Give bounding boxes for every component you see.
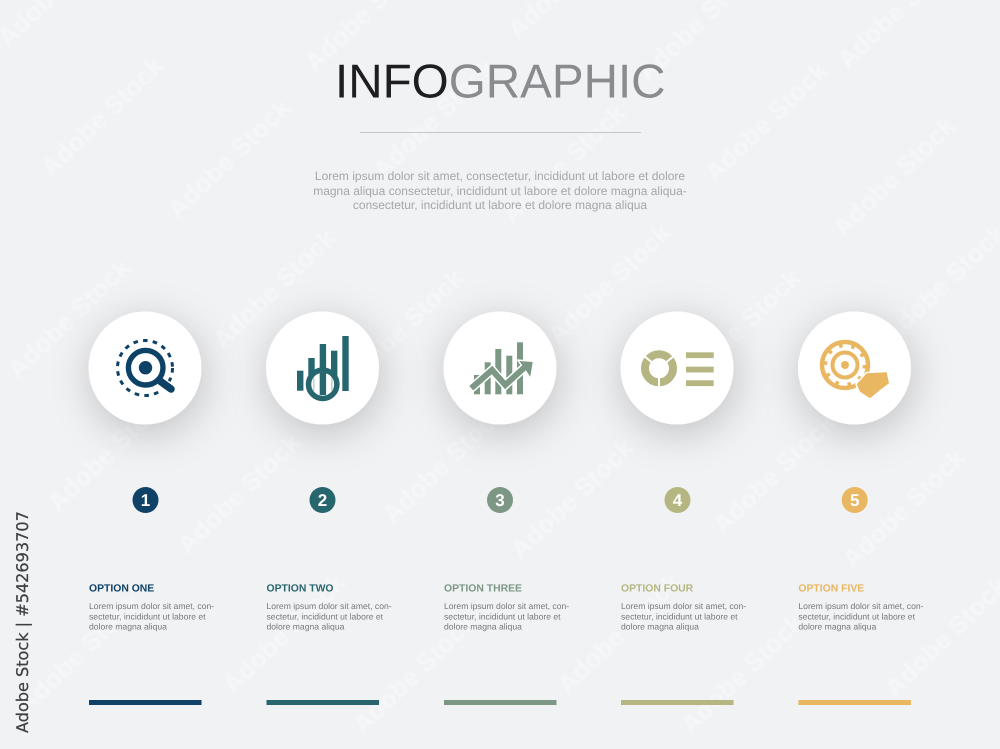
option three text: dolore magna aliqua xyxy=(444,622,522,632)
badge 3 xyxy=(487,487,513,513)
text: Adobe Stock xyxy=(698,55,834,188)
option three text: sectetur, incididunt ut labore et xyxy=(444,611,561,621)
badge 4: 4 xyxy=(673,491,683,510)
option four text: dolore magna aliqua xyxy=(621,622,699,632)
option one text: Lorem ipsum dolor sit amet, con- xyxy=(89,601,214,611)
bar 1 xyxy=(89,700,202,705)
text: Adobe Stock xyxy=(216,567,352,700)
option five text: dolore magna aliqua xyxy=(798,622,876,632)
intro text: Lorem ipsum dolor sit amet, consectetur, incididunt ut labore et dolore xyxy=(315,169,685,183)
circle 3 xyxy=(444,312,556,424)
text: Adobe Stock xyxy=(161,92,297,225)
text: Adobe Stock xyxy=(41,385,177,518)
badge 2: 2 xyxy=(318,491,327,510)
option two text xyxy=(266,584,392,632)
icon: bars with rising arrow xyxy=(471,342,533,394)
bar 3 xyxy=(444,700,556,705)
text: Adobe Stock xyxy=(11,587,147,720)
text: Adobe Stock xyxy=(504,432,640,565)
text: Adobe Stock xyxy=(496,97,632,230)
badge 3: 3 xyxy=(495,491,505,510)
text: Adobe Stock xyxy=(376,397,512,530)
intro text: magna aliqua consectetur, incididunt ut labore et dolore magna aliqua- xyxy=(313,184,687,198)
text: Adobe Stock xyxy=(206,222,342,355)
badge 4 xyxy=(664,487,690,513)
badge 5: 5 xyxy=(850,491,859,510)
circle 5 xyxy=(798,312,911,424)
icon: donut chart and list xyxy=(637,350,714,388)
icon: magnifier with dashed ring xyxy=(118,340,172,396)
option five text: sectetur, incididunt ut labore et xyxy=(798,611,916,621)
option three text: Lorem ipsum dolor sit amet, con- xyxy=(444,601,569,611)
option four text: OPTION FOUR xyxy=(621,584,694,594)
text: Adobe Stock xyxy=(1,252,137,385)
text: Adobe Stock xyxy=(541,217,677,350)
text: Adobe Stock xyxy=(551,567,687,700)
bar 4 xyxy=(621,700,734,705)
option three text xyxy=(444,584,569,632)
text: Adobe Stock xyxy=(346,607,482,740)
badge 5 xyxy=(842,487,868,513)
bar 5 xyxy=(798,700,911,705)
text: Adobe Stock xyxy=(366,52,502,185)
badge 2 xyxy=(310,487,336,513)
text: Adobe Stock xyxy=(334,262,470,395)
stock credit: Adobe Stock | #542693707 xyxy=(13,511,32,733)
text: Adobe Stock xyxy=(826,110,962,243)
option three text: OPTION THREE xyxy=(444,584,522,594)
option two text: dolore magna aliqua xyxy=(266,622,345,632)
option five text: Lorem ipsum dolor sit amet, con- xyxy=(798,601,924,611)
option one text: sectetur, incididunt ut labore et xyxy=(89,611,206,621)
bar 2 xyxy=(266,700,379,705)
option four text: Lorem ipsum dolor sit amet, con- xyxy=(621,601,746,611)
option one text: OPTION ONE xyxy=(89,584,154,594)
option one text xyxy=(89,584,214,632)
option four text: sectetur, incididunt ut labore et xyxy=(621,611,738,621)
title: INFOGRAPHIC xyxy=(335,56,666,108)
text: Adobe Stock xyxy=(171,427,307,560)
text: Adobe Stock xyxy=(674,607,810,740)
option four text xyxy=(621,584,746,632)
icon: bar chart with magnifier xyxy=(297,336,349,398)
text: Adobe Stock xyxy=(671,262,807,395)
badge 1 xyxy=(132,487,158,513)
text: Adobe Stock xyxy=(706,407,842,540)
icon: gear coin with hand xyxy=(822,342,889,398)
option one text: dolore magna aliqua xyxy=(89,622,167,632)
badge 1: 1 xyxy=(141,491,150,510)
option five text xyxy=(798,584,924,632)
text: Adobe Stock xyxy=(34,50,170,183)
circle 4 xyxy=(620,312,734,424)
intro text: consectetur, incididunt ut labore et dolore magna aliqua xyxy=(353,198,647,212)
intro text xyxy=(313,169,687,212)
circle 1 xyxy=(88,312,202,424)
option five text: OPTION FIVE xyxy=(798,584,864,594)
option two text: OPTION TWO xyxy=(266,584,333,594)
option two text: sectetur, incididunt ut labore et xyxy=(266,611,384,621)
option two text: Lorem ipsum dolor sit amet, con- xyxy=(266,601,392,611)
circle 2 xyxy=(266,312,379,424)
text: Adobe Stock xyxy=(836,442,972,575)
